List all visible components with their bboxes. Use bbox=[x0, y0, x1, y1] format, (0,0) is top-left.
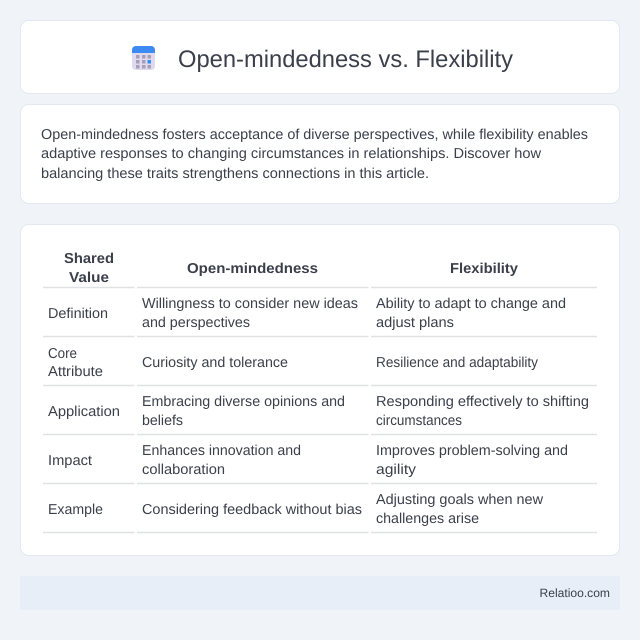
table header row: Shared bbox=[64, 251, 114, 267]
row: application: Responding effectively to shifting bbox=[376, 394, 589, 410]
row: definition: Definition bbox=[48, 306, 108, 322]
row: core attribute bbox=[48, 346, 539, 380]
row: impact bbox=[48, 443, 568, 478]
row: definition: adjust plans bbox=[376, 315, 454, 331]
row: core attribute: Curiosity and tolerance bbox=[142, 355, 288, 371]
footer credit: Relatioo.com bbox=[540, 586, 610, 600]
row: application: Application bbox=[48, 404, 120, 420]
intro text: balancing these traits strengthens connections in this article. bbox=[41, 166, 429, 182]
table header row: Open-mindedness bbox=[187, 261, 318, 277]
row: application: beliefs bbox=[142, 413, 183, 429]
row: impact: Impact bbox=[48, 453, 92, 469]
row: example: Considering feedback without bias bbox=[142, 502, 362, 518]
row: definition bbox=[48, 296, 566, 331]
icon: calendar bbox=[132, 46, 155, 70]
footer bar bbox=[20, 576, 620, 610]
title: Open-mindedness vs. Flexibility bbox=[178, 46, 513, 73]
row: example: challenges arise bbox=[376, 511, 479, 527]
row: definition: Ability to adapt to change and bbox=[376, 296, 566, 312]
row: application: circumstances bbox=[376, 413, 462, 429]
panel: comparison table bbox=[20, 224, 620, 556]
row: core attribute: Resilience and adaptability bbox=[376, 355, 539, 371]
table header row: Flexibility bbox=[450, 261, 518, 277]
row: impact: Improves problem-solving and bbox=[376, 443, 568, 459]
table header row bbox=[64, 251, 518, 286]
row: core attribute: Core bbox=[48, 346, 77, 362]
panel: introduction bbox=[20, 104, 620, 204]
row: impact: agility bbox=[376, 462, 417, 478]
row: definition: and perspectives bbox=[142, 315, 250, 331]
table header row: Value bbox=[69, 270, 109, 286]
row: definition: Willingness to consider new ideas bbox=[142, 296, 358, 312]
panel: title header bbox=[20, 20, 620, 94]
row: core attribute: Attribute bbox=[48, 364, 103, 380]
intro text: adaptive responses to changing circumstances in relationships. Discover how bbox=[41, 146, 542, 162]
intro text: Open-mindedness fosters acceptance of diverse perspectives, while flexibility enables bbox=[41, 127, 588, 143]
row: example: Example bbox=[48, 502, 103, 518]
row: impact: Enhances innovation and bbox=[142, 443, 301, 459]
row: application bbox=[48, 394, 589, 429]
row: example: Adjusting goals when new bbox=[376, 492, 544, 508]
row: application: Embracing diverse opinions and bbox=[142, 394, 345, 410]
row: impact: collaboration bbox=[142, 462, 225, 478]
intro text bbox=[41, 127, 588, 182]
row: example bbox=[48, 492, 544, 527]
